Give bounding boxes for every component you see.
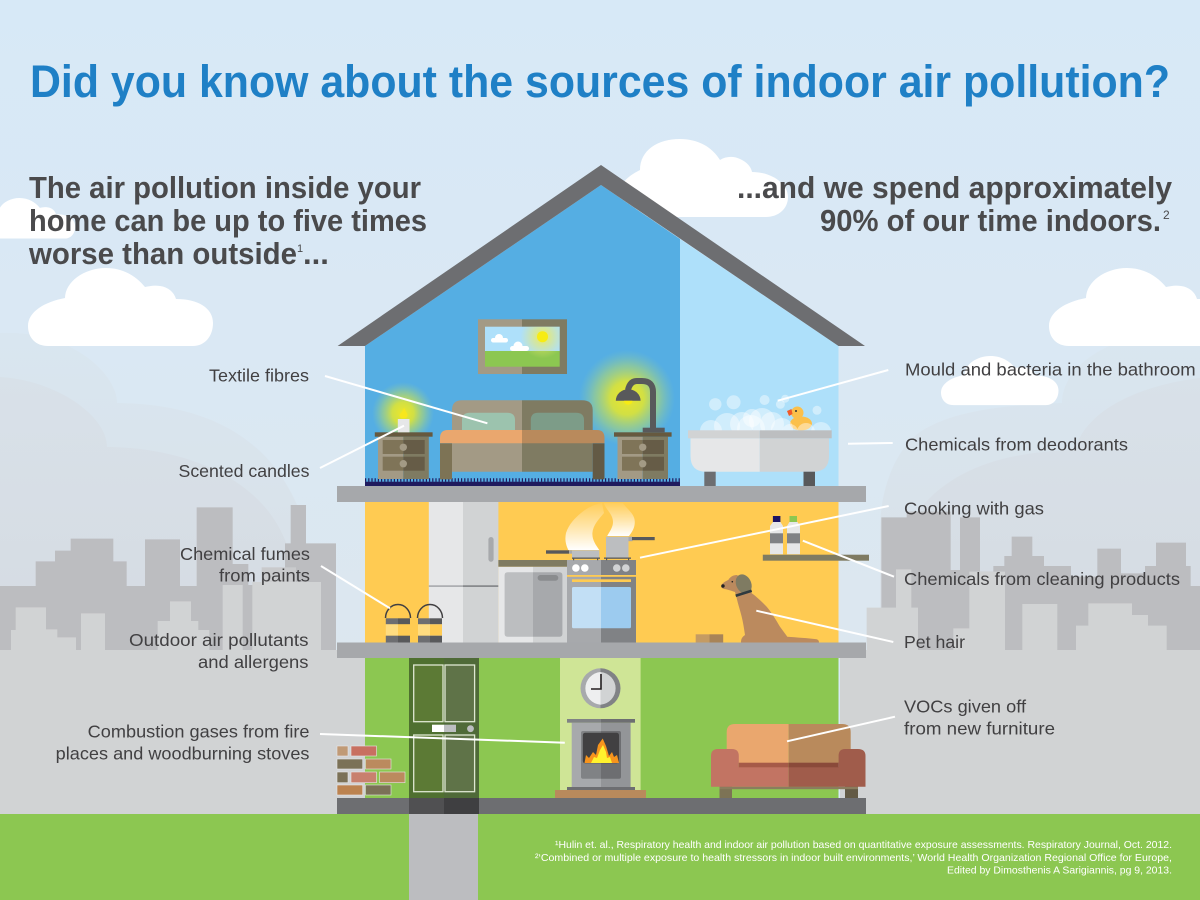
- cloud: top centre: [619, 139, 788, 217]
- pointer: combustion gases: [320, 734, 565, 743]
- box on floor: [696, 634, 723, 642]
- intro text right: [737, 170, 1173, 238]
- cleaning bottles: [770, 516, 800, 554]
- label: chemical fumes: Chemical fumes: [180, 544, 310, 564]
- intro text right: 2: [1163, 208, 1170, 222]
- label: pet hair: Pet hair: [904, 632, 965, 652]
- stove: [567, 719, 635, 790]
- label: VOCs: [904, 697, 1055, 738]
- footnotes: ¹Hulin et. al., Respiratory health and indoor air pollution based on quantitative exposure assessments. Respiratory Journal, Oct. 2012.: [555, 839, 1172, 851]
- picture: [478, 315, 567, 374]
- intro text right: 90% of our time indoors.: [820, 203, 1161, 238]
- intro text right: ...and we spend approximately: [737, 170, 1173, 205]
- sky background: [0, 0, 1200, 660]
- label: cooking with gas: Cooking with gas: [904, 499, 1044, 519]
- label: combustion gases: places and woodburning stoves: [56, 743, 310, 763]
- floor slab ground: [337, 798, 866, 814]
- label: scented candles: Scented candles: [178, 461, 310, 481]
- cloud: small right: [941, 356, 1058, 405]
- title: Did you know about the sources of indoor air pollution?: [30, 56, 1170, 107]
- bricks: [337, 746, 405, 795]
- intro text left: [28, 170, 427, 271]
- sofa: [711, 724, 866, 798]
- pointer: textile fibres: [325, 376, 487, 423]
- house: [337, 165, 869, 814]
- label: textile fibres: Textile fibres: [209, 366, 309, 386]
- lamp: [616, 381, 665, 432]
- intro text left: ...: [303, 236, 329, 271]
- label: mould and bacteria: Mould and bacteria in the bathroom: [905, 360, 1196, 380]
- shelf: [763, 555, 869, 561]
- clock: [580, 668, 620, 708]
- city skyline left: [0, 505, 367, 814]
- label: deodorants: Chemicals from deodorants: [905, 435, 1128, 455]
- label: chemical fumes: from paints: [219, 566, 310, 586]
- right bedside table: [614, 432, 672, 479]
- cloud: large right: [1049, 268, 1200, 346]
- foam bubbles: [700, 394, 831, 431]
- cloud: large left: [28, 268, 213, 346]
- pointer: VOCs: [787, 717, 895, 741]
- hearth: [555, 790, 646, 798]
- label: outdoor air pollutants: and allergens: [198, 652, 309, 672]
- footnotes: [535, 839, 1172, 877]
- fire: [584, 738, 619, 763]
- label: combustion gases: [56, 722, 310, 763]
- scented candle: [398, 408, 410, 432]
- pointer: cooking with gas: [640, 506, 889, 558]
- label: outdoor air pollutants: Outdoor air pollutants: [129, 630, 309, 650]
- pointer: scented candles: [320, 426, 404, 468]
- cloud: top left cropped: [0, 198, 75, 239]
- label: outdoor air pollutants: [129, 630, 309, 672]
- bed: [440, 400, 604, 479]
- cooker: [567, 560, 636, 642]
- floor slab upper: [337, 486, 866, 502]
- paint pots: [386, 604, 442, 642]
- label: chemical fumes: [180, 544, 310, 586]
- chimney breast: [560, 658, 641, 790]
- pointer: chemical fumes: [321, 566, 390, 608]
- candle glow: [372, 382, 434, 444]
- left bedside table: [375, 432, 433, 479]
- kitchen unit: [498, 560, 567, 643]
- label: cleaning products: Chemicals from cleaning products: [904, 569, 1180, 589]
- label: combustion gases: Combustion gases from fire: [88, 722, 310, 742]
- smog haze right: [880, 333, 1200, 660]
- pointer: deodorants: [848, 442, 893, 445]
- floor slab middle: [337, 642, 866, 658]
- pointer: mould: [778, 370, 888, 401]
- lamp glow: [579, 350, 675, 446]
- roof: [338, 165, 865, 346]
- intro text left: home can be up to five times: [29, 203, 427, 238]
- fridge: [429, 502, 498, 642]
- walls top floor: [365, 185, 838, 486]
- intro text left: worse than outside: [28, 236, 297, 271]
- pointer: pet hair: [756, 611, 893, 642]
- front door: [409, 658, 479, 798]
- steam: [565, 503, 635, 550]
- rubber duck: [787, 406, 812, 430]
- footnotes: ²‘Combined or multiple exposure to health stressors in indoor built environments,’ World Health Organization Regional Office for Europe,: [535, 852, 1172, 864]
- label: VOCs: from new furniture: [904, 718, 1055, 738]
- footnotes: Edited by Dimosthenis A Sarigiannis, pg 9, 2013.: [947, 865, 1172, 877]
- intro text left: The air pollution inside your: [29, 170, 421, 205]
- dog: [721, 572, 819, 642]
- ground and path: [0, 814, 1200, 900]
- smog haze left: [0, 333, 297, 660]
- bath: [688, 395, 832, 486]
- kitchen wall: [365, 502, 838, 643]
- city skyline right: [840, 512, 1200, 814]
- intro text left: 1: [297, 243, 303, 255]
- living room wall: [365, 658, 838, 798]
- label: VOCs: VOCs given off: [904, 697, 1026, 717]
- pans: [546, 537, 655, 560]
- carpet: [365, 480, 680, 486]
- pointer: cleaning products: [803, 541, 894, 577]
